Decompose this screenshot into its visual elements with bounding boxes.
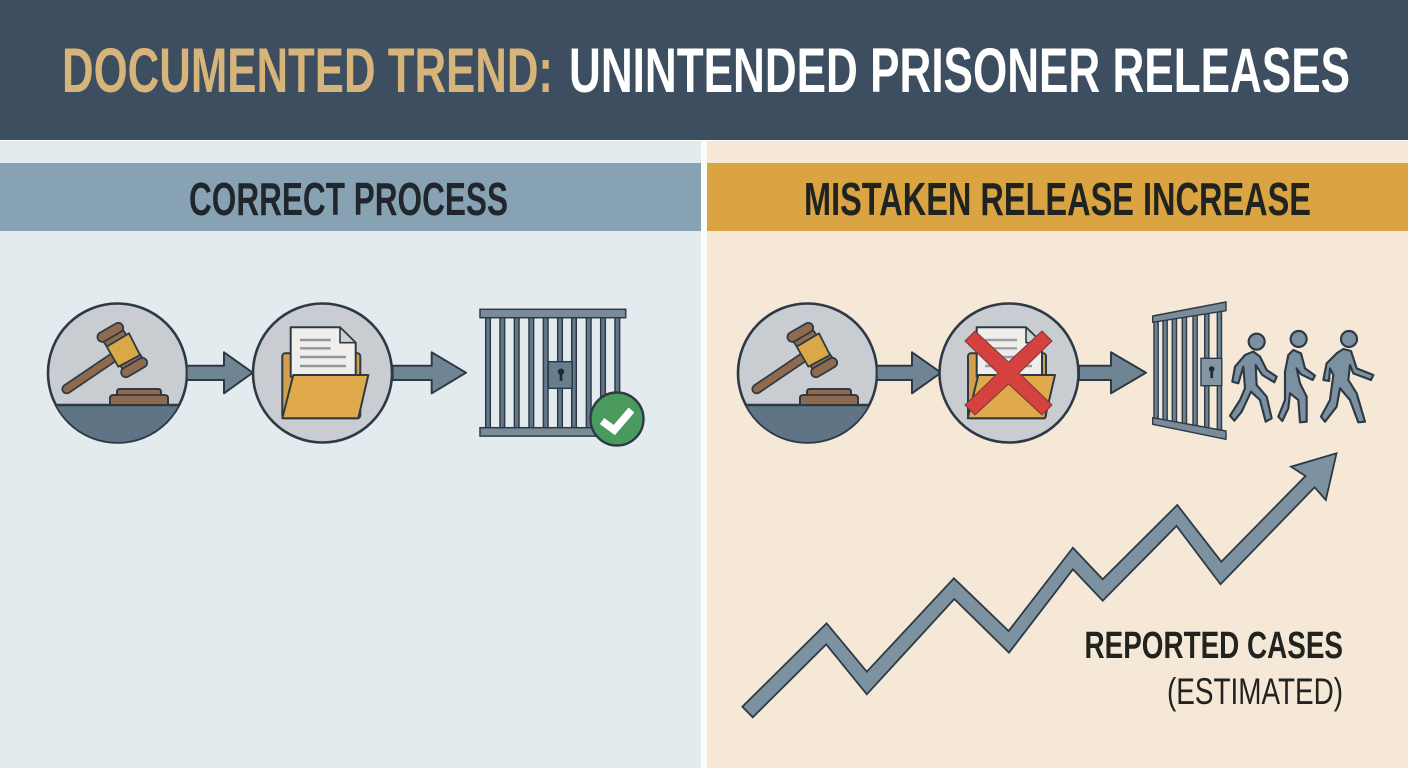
panel heading: mistaken release increase bbox=[707, 163, 1408, 231]
icon: walking person 3 bbox=[1321, 331, 1373, 422]
icon: green check badge bbox=[590, 392, 644, 446]
icon: gavel in circle bbox=[46, 302, 188, 444]
chart: rising zigzag trend arrow bbox=[742, 453, 1336, 717]
icon: open jail door bbox=[1153, 302, 1226, 439]
icon: walking person 2 bbox=[1278, 331, 1315, 422]
panel: correct process bbox=[0, 141, 701, 768]
panel heading: correct process: CORRECT PROCESS bbox=[189, 173, 508, 225]
panel: mistaken release increase bbox=[707, 141, 1408, 768]
icon: folder in circle bbox=[253, 304, 392, 442]
arrow: crossed folder to open jail bbox=[1079, 352, 1146, 393]
icon: closed jail cell bbox=[480, 309, 626, 436]
chart label: estimated: (ESTIMATED) bbox=[1167, 671, 1343, 712]
icon: gavel in circle bbox=[736, 302, 878, 444]
icon: walking person 1 bbox=[1230, 334, 1277, 422]
arrow: gavel to folder bbox=[187, 352, 253, 393]
arrow: folder to jail bbox=[393, 352, 466, 393]
chart label: reported cases bbox=[1084, 625, 1343, 712]
title: gold part: DOCUMENTED TREND: bbox=[62, 36, 553, 106]
icon: crossed-out folder in circle bbox=[940, 304, 1078, 442]
panel heading: correct process bbox=[0, 163, 701, 231]
arrow: gavel to crossed folder bbox=[877, 352, 941, 393]
title banner bbox=[0, 0, 1408, 140]
icon: red X bbox=[965, 331, 1052, 415]
